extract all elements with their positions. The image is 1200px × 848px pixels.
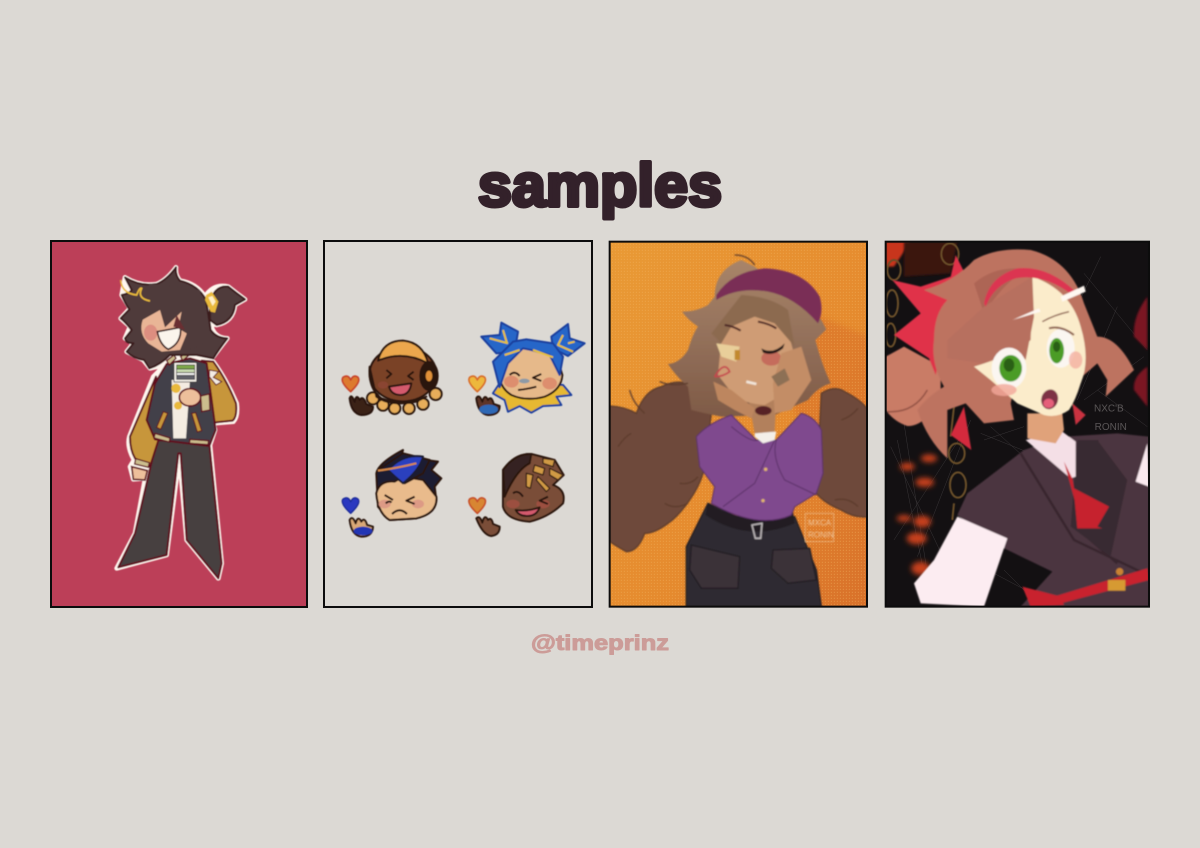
figure flag	[174, 363, 197, 382]
white shirt collar and sleeve	[1026, 432, 1076, 478]
hair strand details	[618, 255, 858, 507]
faint signature: NXC'B	[1094, 404, 1124, 415]
hair fringe	[983, 278, 1035, 360]
vest	[957, 433, 1149, 607]
emote: hand 3	[350, 518, 373, 537]
figure smile	[157, 327, 181, 349]
white hair clips	[1061, 286, 1086, 302]
face	[717, 316, 794, 406]
faint signature: RONIN	[1095, 422, 1127, 433]
figure hair back	[121, 267, 227, 368]
signature tag: MXCA	[808, 518, 832, 527]
emote: hand 1	[350, 396, 373, 415]
hands	[713, 382, 755, 418]
signature tag: RONIN	[808, 530, 834, 539]
collar	[755, 432, 776, 443]
emote: cap face	[367, 341, 442, 414]
blush	[991, 384, 1017, 396]
sweater	[696, 413, 823, 520]
left eye	[992, 348, 1026, 389]
emote: hand 4	[476, 517, 500, 536]
emote: yellow heart	[469, 376, 485, 392]
figure pockets and patch	[157, 412, 202, 432]
title: samples	[478, 152, 722, 219]
figure white sticker outline	[117, 267, 245, 578]
emote: dark hair face	[376, 450, 441, 520]
right eye	[1047, 329, 1075, 368]
eyes	[761, 343, 785, 354]
belt and bow	[1054, 568, 1149, 603]
ponytail	[886, 347, 941, 426]
skirt	[686, 503, 821, 607]
infographic canvas	[50, 160, 1150, 655]
figure jacket body	[147, 358, 216, 446]
panel 3 frame	[610, 242, 867, 607]
faint signature	[1094, 404, 1127, 433]
red headband	[984, 268, 1076, 307]
chain	[886, 243, 966, 520]
skirt pockets	[690, 545, 740, 588]
red hair bow	[892, 255, 964, 375]
figure jacket trim	[135, 352, 210, 467]
figure hands	[132, 467, 147, 480]
panel: character on red background	[51, 241, 307, 607]
figure face	[141, 303, 188, 352]
signature tag	[805, 513, 834, 542]
neck	[1027, 413, 1064, 443]
emote: blue pigtail face	[481, 323, 585, 413]
panel: emote set	[324, 241, 592, 607]
mouth	[1039, 388, 1060, 411]
top-left flame and maroon shape	[886, 242, 911, 267]
buttons	[764, 468, 767, 471]
red tie	[1064, 462, 1109, 528]
figure fringe	[138, 283, 207, 350]
figure yellow hair ribbon	[121, 280, 150, 301]
figure trousers	[118, 440, 222, 578]
panel 4 frame	[886, 242, 1149, 607]
panel: girl with red ribbon on dark background	[886, 242, 1149, 607]
background diagonal band	[795, 318, 866, 422]
handle credit: @timeprinz	[531, 632, 669, 655]
ember spots	[897, 454, 937, 575]
belt	[705, 503, 795, 532]
emote: hand 2	[476, 396, 500, 415]
right hair mass	[816, 389, 868, 517]
figure shirt	[172, 380, 190, 438]
red hair ribbon ends	[951, 407, 971, 450]
dark background scratch lines	[891, 257, 1147, 603]
beret	[716, 268, 821, 323]
hair back	[917, 249, 1134, 458]
emote: blue heart	[342, 498, 359, 513]
left hair mass	[610, 382, 711, 552]
emote: orange heart 2	[469, 498, 485, 513]
face	[974, 277, 1086, 416]
emote panel frame	[324, 241, 592, 607]
neck and choker	[748, 397, 776, 433]
background dot texture	[610, 242, 867, 607]
upper hair	[668, 260, 831, 417]
figure star accent	[205, 292, 218, 313]
right red rose shapes	[1134, 297, 1147, 350]
figure hair bun	[210, 287, 245, 325]
figure jacket sleeves	[130, 361, 236, 467]
panel: girl on orange background	[610, 242, 868, 607]
emote: braided face	[503, 454, 564, 522]
emote: orange heart 1	[342, 376, 359, 392]
